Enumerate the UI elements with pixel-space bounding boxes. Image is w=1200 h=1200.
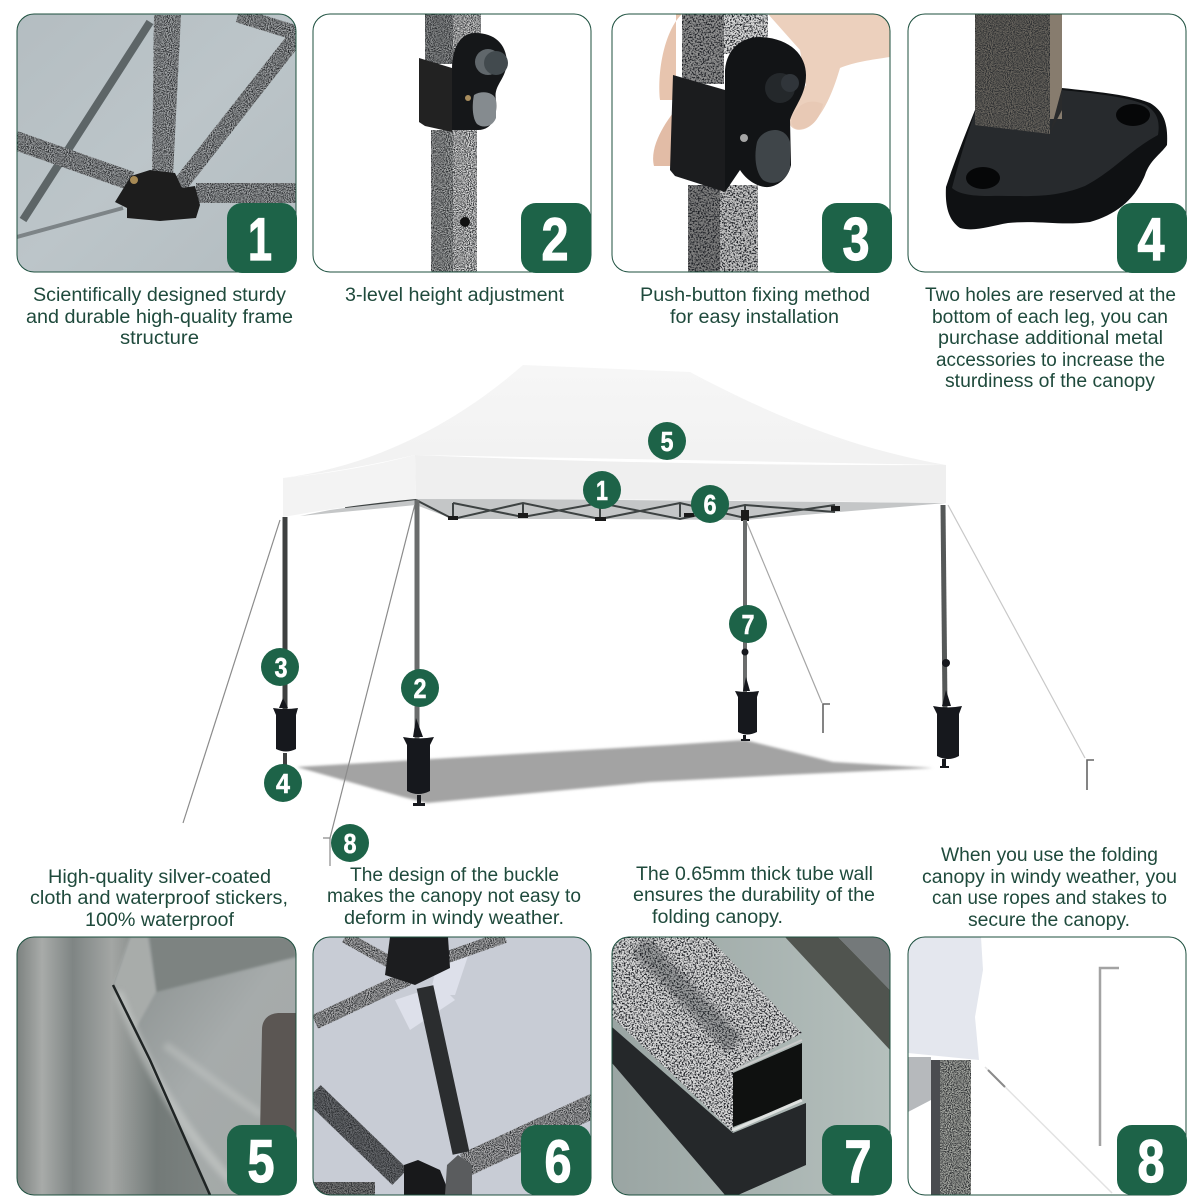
caption 5 <box>30 867 288 931</box>
photo: square tube cross-section <box>612 937 890 1195</box>
caption 7: The 0.65mm thick tube wall <box>636 864 873 885</box>
photo: frame joint <box>14 14 296 272</box>
marker 6: 6 <box>704 489 716 520</box>
photo: hand pressing button <box>653 14 890 272</box>
panel 2: height adjustment <box>313 14 591 273</box>
caption 1: and durable high-quality frame <box>26 307 293 328</box>
caption 1: Scientifically designed sturdy <box>33 285 287 306</box>
marker 4 <box>264 764 302 802</box>
caption 8: secure the canopy. <box>968 910 1130 931</box>
panel outline <box>313 14 591 272</box>
panel 5: silver-coated cloth <box>17 937 297 1195</box>
marker 6 <box>691 485 729 523</box>
photo: adjustable leg <box>419 14 508 272</box>
caption 5: 100% waterproof <box>85 910 235 931</box>
caption 6: The design of the buckle <box>350 865 559 886</box>
badge 6 <box>521 1125 591 1195</box>
marker 7 <box>729 605 767 643</box>
badge 8 <box>1117 1125 1187 1195</box>
caption 6: makes the canopy not easy to <box>327 886 581 907</box>
legs <box>285 500 945 765</box>
caption 3 <box>640 285 870 328</box>
canopy roof <box>283 365 946 478</box>
marker 8: 8 <box>344 828 356 859</box>
panel outline <box>908 14 1186 272</box>
caption 7: ensures the durability of the <box>633 885 875 906</box>
panel 6: buckle <box>313 937 595 1195</box>
caption 6: deform in windy weather. <box>344 908 564 929</box>
captions: bottom row <box>30 845 1177 931</box>
marker 4: 4 <box>276 768 290 799</box>
badge 6: 6 <box>544 1128 572 1195</box>
caption 4: purchase additional metal <box>938 328 1163 349</box>
panel outline <box>612 937 890 1195</box>
marker 3 <box>261 648 299 686</box>
canopy front valance <box>415 455 946 503</box>
panel outline <box>612 14 890 272</box>
marker 1: 1 <box>596 475 608 506</box>
badge 1 <box>227 203 297 273</box>
caption 4: bottom of each leg, you can <box>932 307 1168 328</box>
caption 7: folding canopy. <box>652 907 783 928</box>
caption 4: accessories to increase the <box>936 350 1165 371</box>
badge 7: 7 <box>844 1128 872 1195</box>
panel outline <box>908 937 1186 1195</box>
caption 3: for easy installation <box>670 307 839 328</box>
panel 8: ropes and stakes <box>908 937 1187 1195</box>
caption 5: High-quality silver-coated <box>48 867 271 888</box>
caption 5: cloth and waterproof stickers, <box>30 888 288 909</box>
photo: leg foot plate <box>946 14 1167 229</box>
sandbags and feet <box>273 648 962 806</box>
panel 7: tube wall <box>612 937 892 1195</box>
panel outline <box>313 937 591 1195</box>
central canopy tent illustration <box>183 365 1094 866</box>
marker 2 <box>401 669 439 707</box>
marker 3: 3 <box>274 652 288 683</box>
panel outline <box>17 937 296 1195</box>
photo: canopy corner, rope and stake <box>908 938 1119 1194</box>
photo: buckle and frame <box>313 937 595 1195</box>
caption 6 <box>327 865 581 929</box>
canopy underside and truss <box>300 498 946 521</box>
badge 2: 2 <box>542 206 568 273</box>
marker 2: 2 <box>414 673 426 704</box>
caption 3: Push-button fixing method <box>640 285 870 306</box>
badge 4: 4 <box>1138 206 1165 273</box>
badge 5 <box>227 1125 297 1195</box>
panel 4: base plate with two holes <box>908 14 1187 273</box>
marker 5: 5 <box>660 426 674 457</box>
ground shadow <box>297 740 933 803</box>
badge 8: 8 <box>1138 1128 1164 1195</box>
caption 8 <box>922 845 1177 931</box>
caption 7 <box>633 864 875 928</box>
caption 4 <box>925 285 1176 392</box>
marker 7: 7 <box>742 609 754 640</box>
caption 1 <box>26 285 293 349</box>
panel outline <box>17 14 296 272</box>
guy ropes and stakes <box>183 500 1094 866</box>
marker 5 <box>648 422 686 460</box>
badge 5: 5 <box>248 1128 274 1195</box>
badge 3 <box>822 203 892 273</box>
panel 3: push-button fixing <box>612 14 892 273</box>
marker 8 <box>331 824 369 862</box>
panel 1: frame structure <box>14 14 297 273</box>
caption 8: When you use the folding <box>941 845 1158 866</box>
caption 8: canopy in windy weather, you <box>922 867 1177 888</box>
badge 2 <box>521 203 591 273</box>
badge 1: 1 <box>248 206 272 273</box>
marker 1 <box>583 471 621 509</box>
caption 4: sturdiness of the canopy <box>945 371 1155 392</box>
badge 4 <box>1117 203 1187 273</box>
caption 8: can use ropes and stakes to <box>932 888 1167 909</box>
photo: silver fabric <box>17 937 296 1195</box>
badge 7 <box>822 1125 892 1195</box>
canopy side valance <box>283 455 416 517</box>
badge 3: 3 <box>842 206 870 273</box>
caption 2: 3-level height adjustment <box>345 285 565 306</box>
caption 1: structure <box>120 328 199 349</box>
captions: top row <box>26 285 1176 392</box>
caption 4: Two holes are reserved at the <box>925 285 1176 306</box>
